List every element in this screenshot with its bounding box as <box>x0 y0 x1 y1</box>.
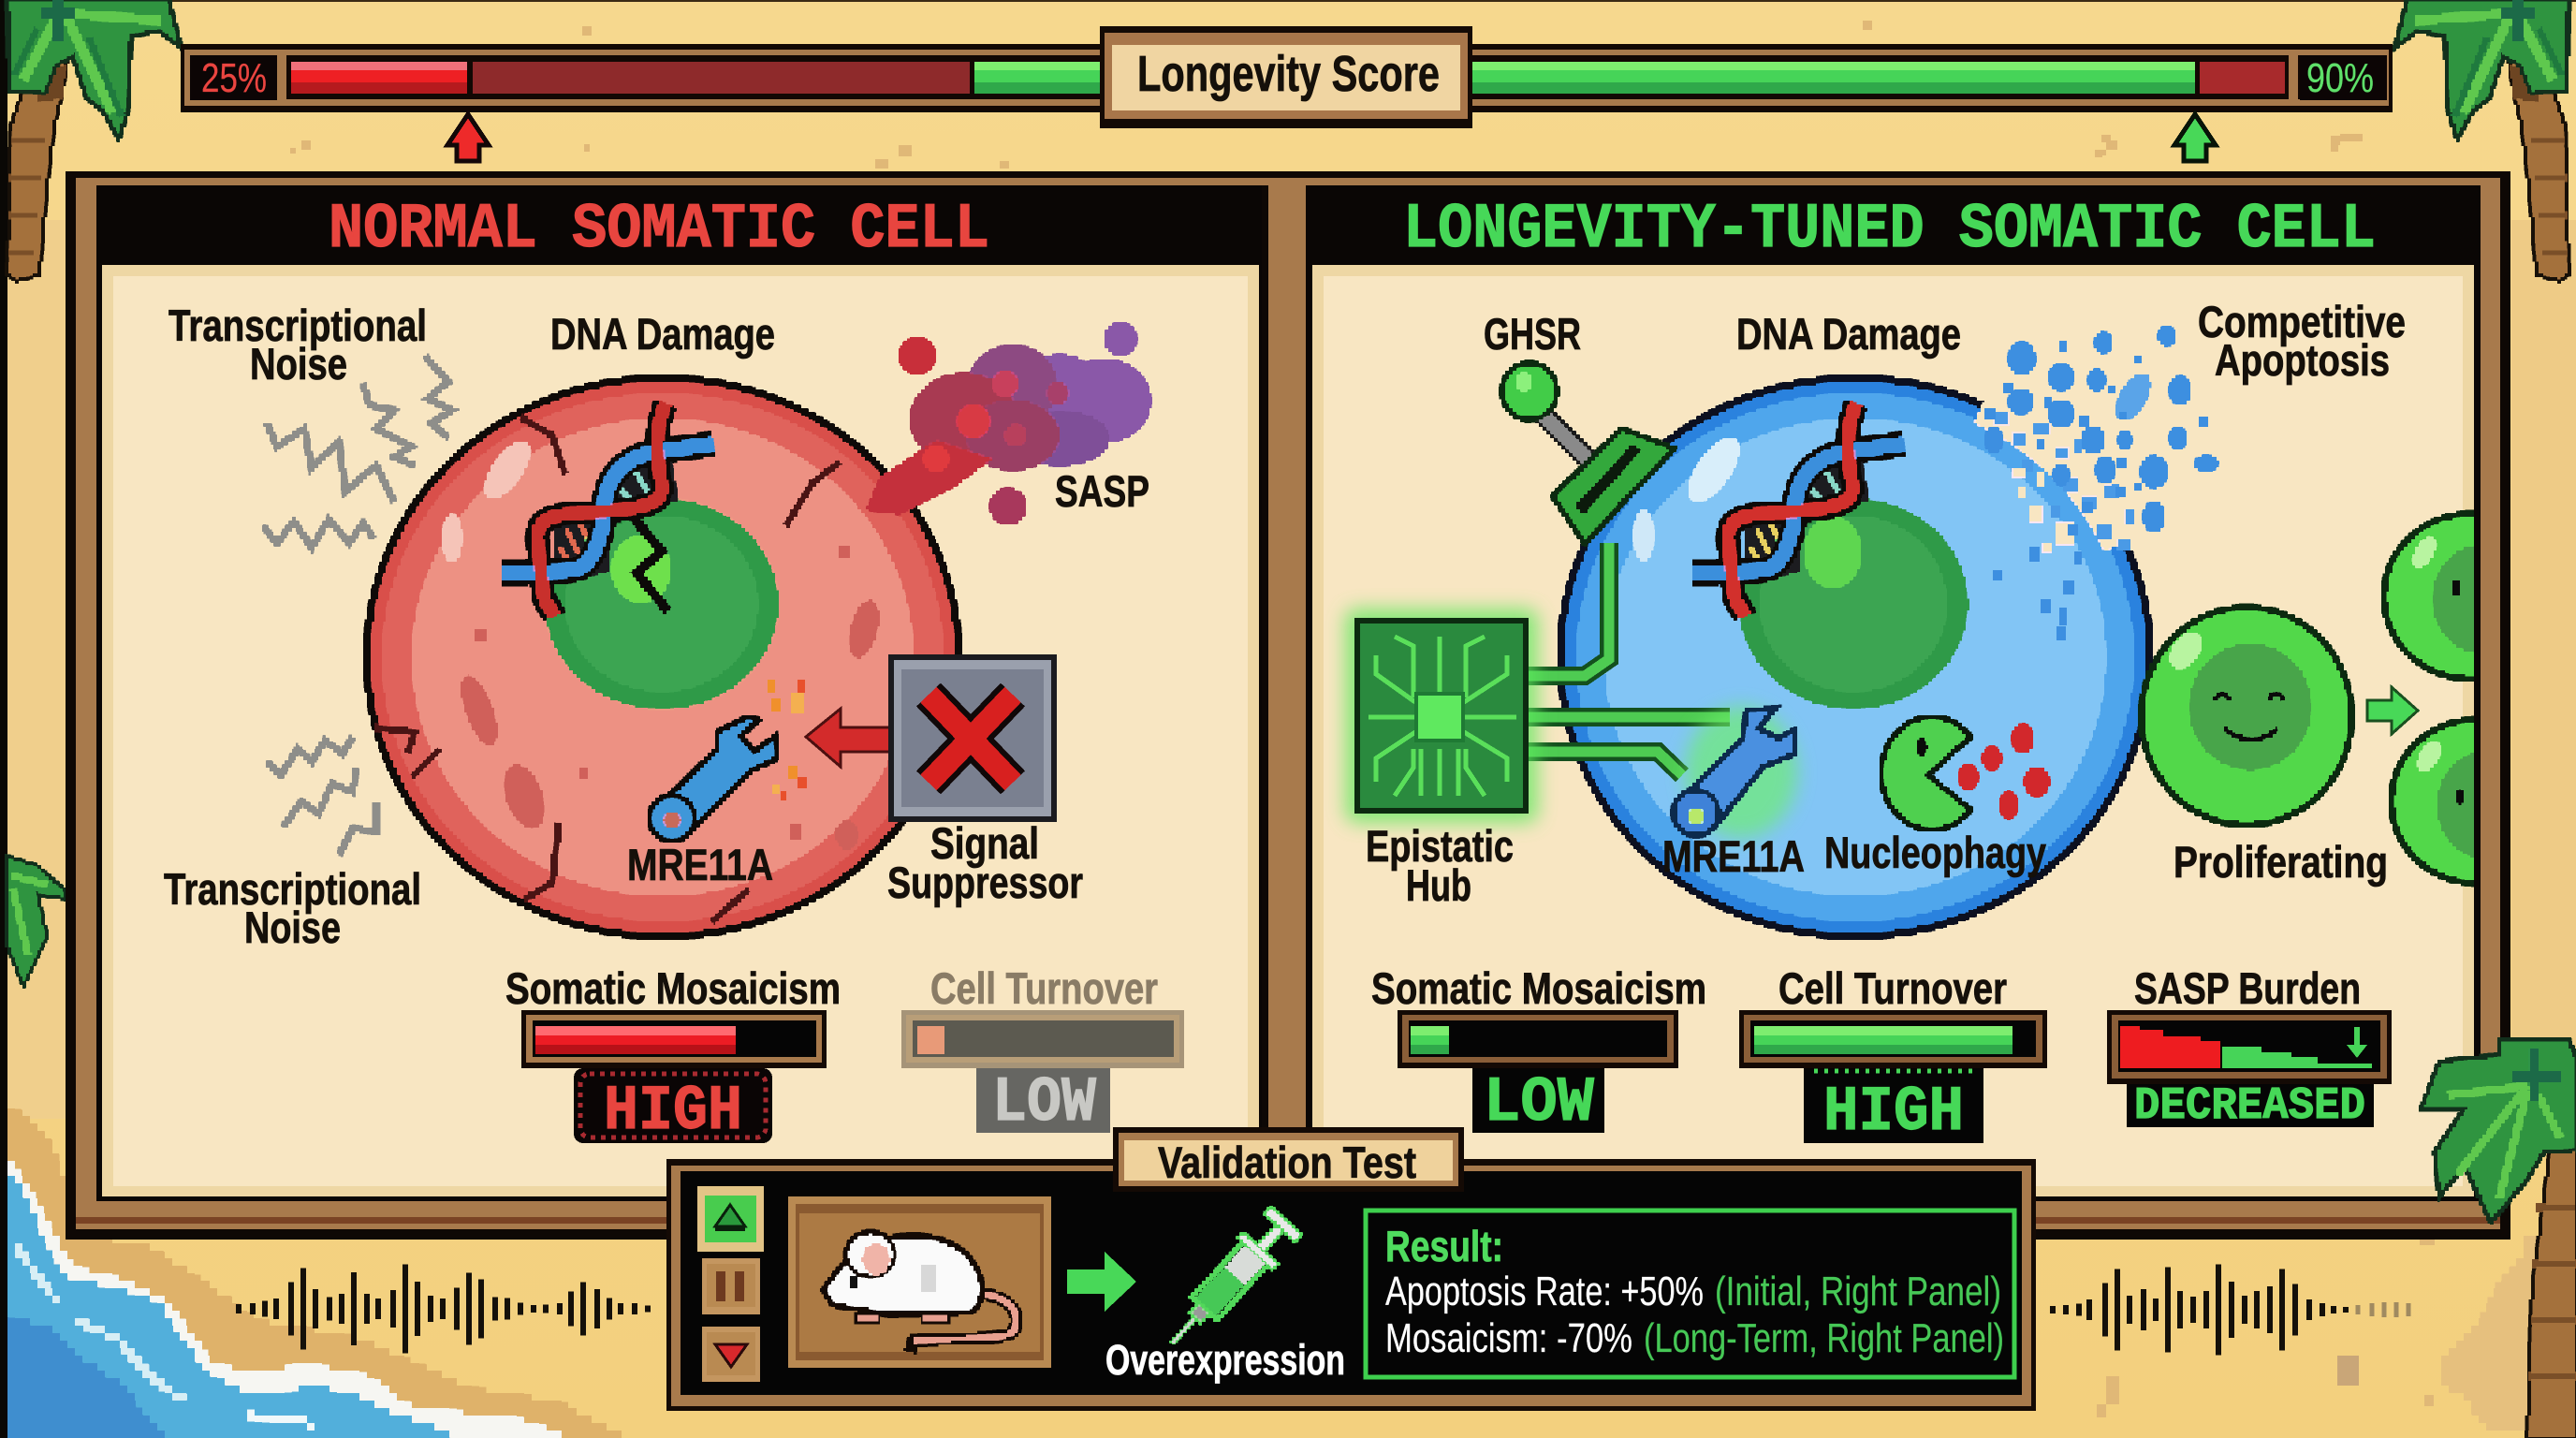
labels: tuned cell: DNA Damage <box>1736 309 1961 359</box>
nucleus <box>545 498 779 710</box>
labels: tuned cell: GHSR <box>1484 309 1581 359</box>
nucleus <box>1738 498 1969 710</box>
result box <box>1366 1211 2014 1377</box>
signal suppressor block <box>888 654 1057 822</box>
arrow: proliferation <box>2367 687 2418 734</box>
labels: tuned cell: MRE11A <box>1662 831 1805 881</box>
heading: normal: NORMAL SOMATIC CELL <box>329 194 989 266</box>
arrow: to syringe <box>1067 1252 1136 1312</box>
icon: syringe <box>1155 1205 1303 1358</box>
cell: longevity-tuned <box>1560 378 2150 936</box>
labels: tuned cell: Proliferating <box>2174 837 2388 887</box>
sasp mini chart <box>2120 1026 2372 1068</box>
right score fill <box>1472 62 2285 94</box>
palm tree: top right <box>2395 0 2569 281</box>
tab: validation test: Validation Test <box>1158 1137 1416 1187</box>
stat: SASP burden decreased: DECREASED <box>2134 1081 2365 1132</box>
score bar <box>181 44 2393 112</box>
labels: tuned cell: Nucleophagy <box>1824 828 2046 877</box>
stat: somatic mosaicism high: HIGH <box>604 1076 742 1148</box>
stat: somatic mosaicism high <box>505 963 841 1148</box>
panel: normal somatic cell <box>96 185 1262 1201</box>
result box: Mosaicism: -70% <box>1385 1315 1632 1361</box>
icon: red X <box>929 695 1013 783</box>
stat: cell turnover high: HIGH <box>1823 1077 1964 1149</box>
tab: validation test <box>1113 1127 1464 1192</box>
SASP cloud <box>866 322 1151 525</box>
stat: cell turnover low (muted) <box>901 963 1184 1139</box>
apoptosis fragments <box>1984 326 2218 640</box>
result box: Result: <box>1385 1222 1503 1270</box>
palm tree: top left <box>7 0 181 281</box>
stat: somatic mosaicism low: LOW <box>1484 1067 1594 1139</box>
waveform right <box>2053 1264 2408 1356</box>
GHSR lever <box>1502 363 1674 543</box>
arrow: suppressor to wrench <box>806 709 891 767</box>
title plate: Longevity Score: Longevity Score <box>1137 46 1440 102</box>
wires: hub to receptor and wrench <box>1524 543 1730 775</box>
left score value: 25% <box>201 55 267 101</box>
stat: cell turnover low (muted): Cell Turnover <box>930 963 1158 1013</box>
labels: normal cell: Noise <box>250 339 347 389</box>
beach shoreline and ocean <box>7 1105 627 1438</box>
panel: longevity-tuned somatic cell <box>1307 185 2481 1201</box>
cell erosion <box>1983 404 2123 543</box>
icon: wrench MRE11A, tuned <box>1674 707 1797 838</box>
labels: tuned cell: Hub <box>1406 860 1471 910</box>
arrow: green marker <box>2174 114 2216 161</box>
stat: cell turnover low (muted): LOW <box>992 1067 1096 1139</box>
label: overexpression: Overexpression <box>1105 1336 1345 1384</box>
control button: up <box>697 1186 764 1252</box>
control button: pause <box>702 1258 760 1314</box>
sparks <box>768 680 807 800</box>
daughter cells <box>2381 509 2474 888</box>
labels: normal cell: Transcriptional <box>168 301 427 350</box>
labels: normal cell <box>164 301 1149 952</box>
result box: (Long-Term, Right Panel) <box>1644 1315 2004 1361</box>
result box: Apoptosis Rate: +50% <box>1385 1269 1704 1314</box>
waveform left <box>239 1264 648 1354</box>
palm tree: lower right <box>2422 1040 2576 1438</box>
stat: SASP burden decreased: SASP Burden <box>2134 963 2361 1013</box>
palm tree: lower left <box>7 857 66 986</box>
labels: normal cell: Noise <box>244 902 341 952</box>
labels: tuned cell: Competitive <box>2198 297 2406 346</box>
icon: wrench MRE11A, normal <box>650 717 777 841</box>
cell cracks <box>373 418 841 922</box>
labels: normal cell: Transcriptional <box>164 864 421 914</box>
left score fill <box>291 62 1100 94</box>
mouse frame <box>788 1196 1051 1368</box>
DNA helix: normal <box>501 404 713 616</box>
stat: somatic mosaicism low <box>1371 963 1706 1139</box>
arrow: red marker <box>447 114 489 161</box>
labels: normal cell: SASP <box>1055 466 1149 516</box>
epistatic hub chip <box>1345 609 1538 823</box>
right score value: 90% <box>2306 55 2374 101</box>
noise squiggles <box>263 356 452 855</box>
proliferating cell <box>2142 608 2351 825</box>
heading: longevity-tuned: LONGEVITY-TUNED SOMATIC CELL <box>1403 194 2376 266</box>
labels: normal cell: Signal <box>930 818 1039 868</box>
stat: cell turnover high: Cell Turnover <box>1778 963 2007 1013</box>
cell: normal <box>367 378 959 936</box>
panel: validation test <box>666 1127 2036 1411</box>
comparison frame <box>66 171 2510 1240</box>
labels: normal cell: DNA Damage <box>550 309 775 359</box>
labels: tuned cell: Epistatic <box>1366 821 1514 871</box>
icon: nucleophagy pacman <box>1881 717 2050 829</box>
cell blotches <box>453 545 886 850</box>
labels: normal cell: MRE11A <box>627 840 773 889</box>
title plate: Longevity Score <box>1100 26 1472 128</box>
stat: somatic mosaicism low: Somatic Mosaicism <box>1371 963 1706 1013</box>
labels: tuned cell <box>1366 297 2406 910</box>
result box: (Initial, Right Panel) <box>1715 1269 2001 1314</box>
control button: down <box>702 1327 760 1382</box>
labels: tuned cell: Apoptosis <box>2215 335 2390 385</box>
labels: normal cell: Suppressor <box>887 858 1083 907</box>
stat: somatic mosaicism high: Somatic Mosaicism <box>505 963 841 1013</box>
stat: cell turnover high <box>1739 963 2047 1149</box>
icon: white mouse <box>824 1232 1017 1352</box>
stat: SASP burden decreased <box>2107 963 2392 1132</box>
DNA helix: longevity-tuned <box>1691 404 1904 616</box>
